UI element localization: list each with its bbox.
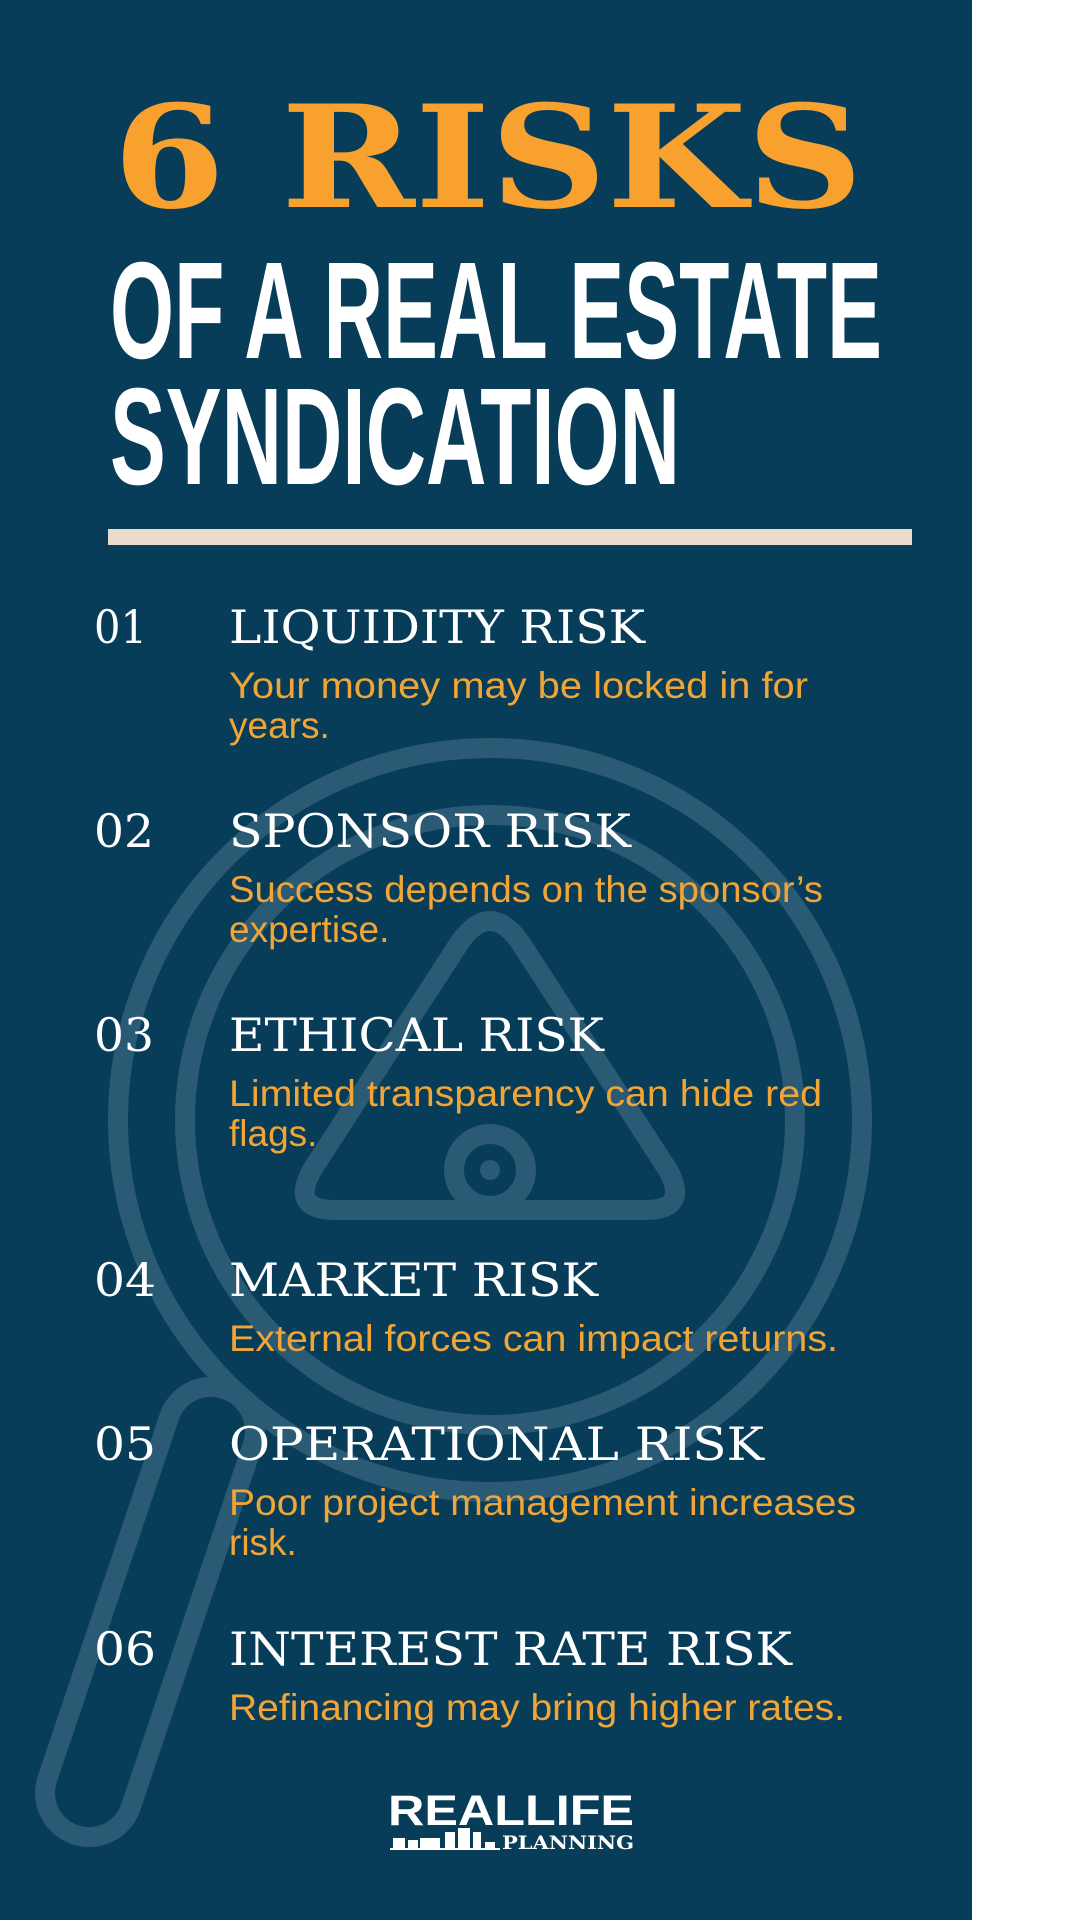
item 05: [94, 1417, 856, 1563]
item 03: ETHICAL RISK: [229, 1008, 606, 1062]
icon: skyline: [390, 1828, 500, 1850]
item 01: Your money may be locked in for: [229, 665, 808, 706]
item 04: MARKET RISK: [229, 1253, 600, 1307]
item 05: 05: [94, 1417, 156, 1471]
list: risks: [94, 600, 856, 1728]
item 04: 04: [94, 1253, 156, 1307]
item 06: Refinancing may bring higher rates.: [229, 1687, 845, 1728]
title: 6 RISKS: 6 RISKS: [113, 75, 863, 241]
title: subtitle: SYNDICATION: [110, 360, 680, 514]
item 02: Success depends on the sponsor’s: [229, 869, 823, 910]
logo: RealLife Planning: [388, 1787, 634, 1854]
logo: RealLife Planning: PLANNING: [502, 1832, 634, 1854]
icon: magnifier with warning: [33, 748, 862, 1849]
item 03: 03: [94, 1008, 154, 1062]
item 05: risk.: [229, 1522, 297, 1563]
item 05: Poor project management increases: [229, 1482, 856, 1523]
divider bar: [108, 529, 912, 545]
item 01: 01: [94, 600, 147, 654]
item 06: [94, 1622, 845, 1728]
item 02: expertise.: [229, 909, 389, 950]
item 01: [94, 600, 808, 746]
item 02: [94, 804, 823, 950]
item 03: [94, 1008, 822, 1154]
logo: RealLife Planning: REALLIFE: [388, 1787, 634, 1835]
item 02: SPONSOR RISK: [229, 804, 633, 858]
item 06: 06: [94, 1622, 156, 1676]
item 04: External forces can impact returns.: [229, 1318, 838, 1359]
item 01: LIQUIDITY RISK: [229, 600, 647, 654]
item 02: 02: [94, 804, 154, 858]
item 06: INTEREST RATE RISK: [229, 1622, 794, 1676]
item 03: flags.: [229, 1113, 317, 1154]
item 04: [94, 1253, 838, 1359]
item 05: OPERATIONAL RISK: [229, 1417, 766, 1471]
item 01: years.: [229, 705, 330, 746]
item 03: Limited transparency can hide red: [229, 1073, 822, 1114]
title: subtitle: [110, 234, 882, 514]
